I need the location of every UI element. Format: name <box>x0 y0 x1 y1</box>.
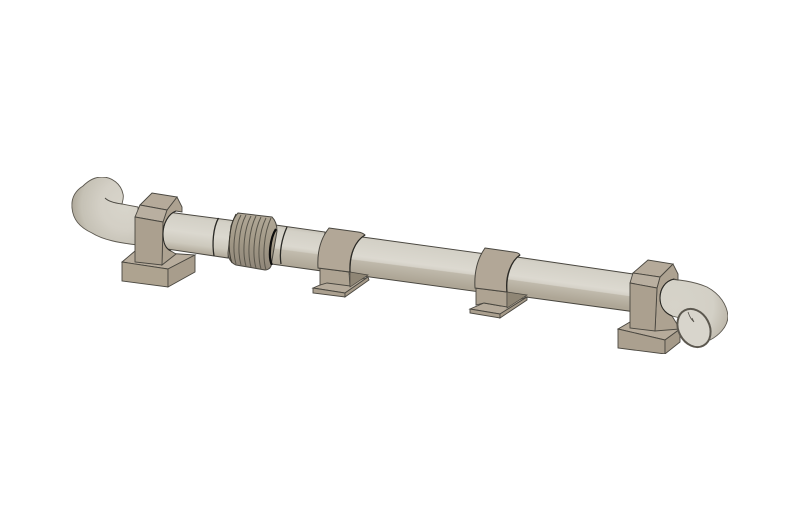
right support base <box>618 322 680 354</box>
foot <box>313 268 369 297</box>
clamp band <box>475 248 520 292</box>
right support body <box>630 260 680 331</box>
support body <box>135 193 182 265</box>
main pipe section <box>348 236 486 292</box>
left pipe section <box>160 211 233 258</box>
right elbow <box>660 279 728 340</box>
left support <box>122 193 195 287</box>
middle support 1 <box>313 228 369 297</box>
pipe opening <box>671 303 717 353</box>
clamp band <box>318 228 365 272</box>
bellows <box>228 213 277 270</box>
pipe section right of bellows <box>264 224 325 271</box>
right pipe section <box>504 256 640 312</box>
foot <box>470 288 527 318</box>
left elbow <box>72 177 138 245</box>
support base <box>122 251 195 287</box>
middle support 2 <box>470 248 527 318</box>
